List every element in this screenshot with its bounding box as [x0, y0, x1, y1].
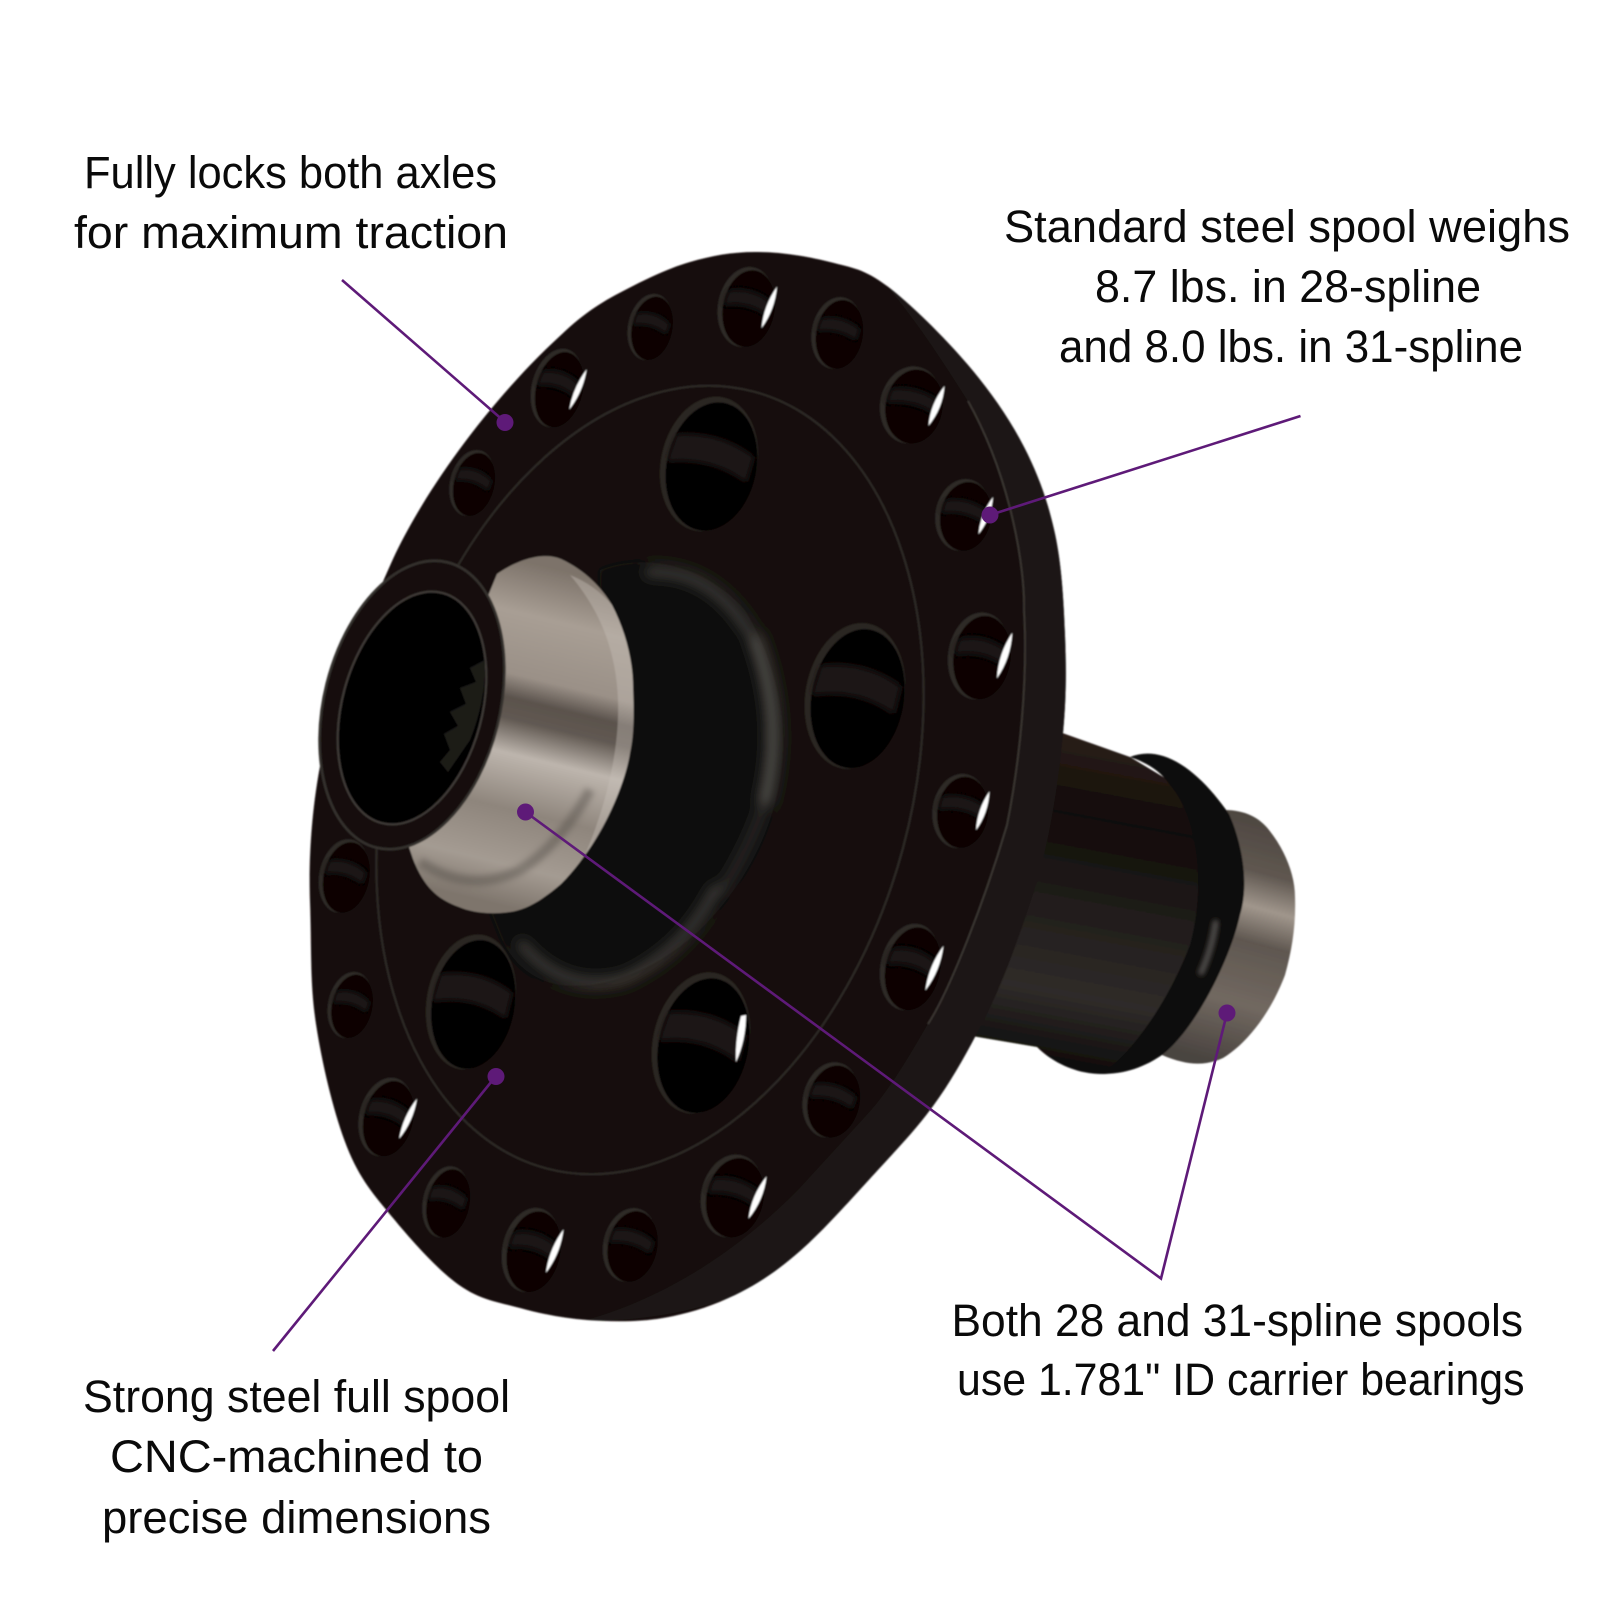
callout: CNC-machined steel: precise dimensions	[102, 1492, 491, 1543]
callout: spool weight: and 8.0 lbs. in 31-spline	[1059, 321, 1523, 372]
callout: spool weight: 8.7 lbs. in 28-spline	[1095, 261, 1481, 312]
bolt holes	[312, 262, 1017, 1298]
callout: locks both axles: Fully locks both axles	[84, 147, 497, 198]
bore	[314, 575, 510, 841]
rim highlight	[928, 401, 1025, 1024]
hub highlights	[522, 572, 773, 982]
callout: carrier bearings: Both 28 and 31-spline spools	[952, 1295, 1523, 1346]
callout: carrier bearings: use 1.781" ID carrier bearings	[957, 1354, 1524, 1405]
silver bearing journal	[400, 556, 634, 913]
bearing shoulder lip	[570, 575, 634, 855]
inner machined ring	[293, 324, 1007, 1236]
bearing shoulder shadow	[420, 790, 590, 881]
callout: spool weight: Standard steel spool weighs	[1004, 201, 1570, 252]
callout: locks both axles: for maximum traction	[74, 207, 508, 258]
internal splines	[440, 660, 485, 772]
callout: CNC-machined steel	[83, 1068, 510, 1543]
flange rim band	[587, 286, 1066, 1320]
black front collar	[291, 541, 533, 869]
rear cylinder and silver stub	[960, 725, 1295, 1074]
callout: CNC-machined steel: CNC-machined to	[110, 1431, 483, 1482]
callout: CNC-machined steel: Strong steel full spool	[83, 1371, 510, 1422]
callout: carrier bearings	[517, 804, 1524, 1405]
callout: locks both axles	[74, 147, 514, 431]
flange disc	[310, 252, 1066, 1321]
central hub dome	[470, 562, 783, 986]
spool product photo	[291, 252, 1295, 1321]
callout: spool weight	[982, 201, 1570, 524]
large mounting holes	[416, 388, 916, 1123]
